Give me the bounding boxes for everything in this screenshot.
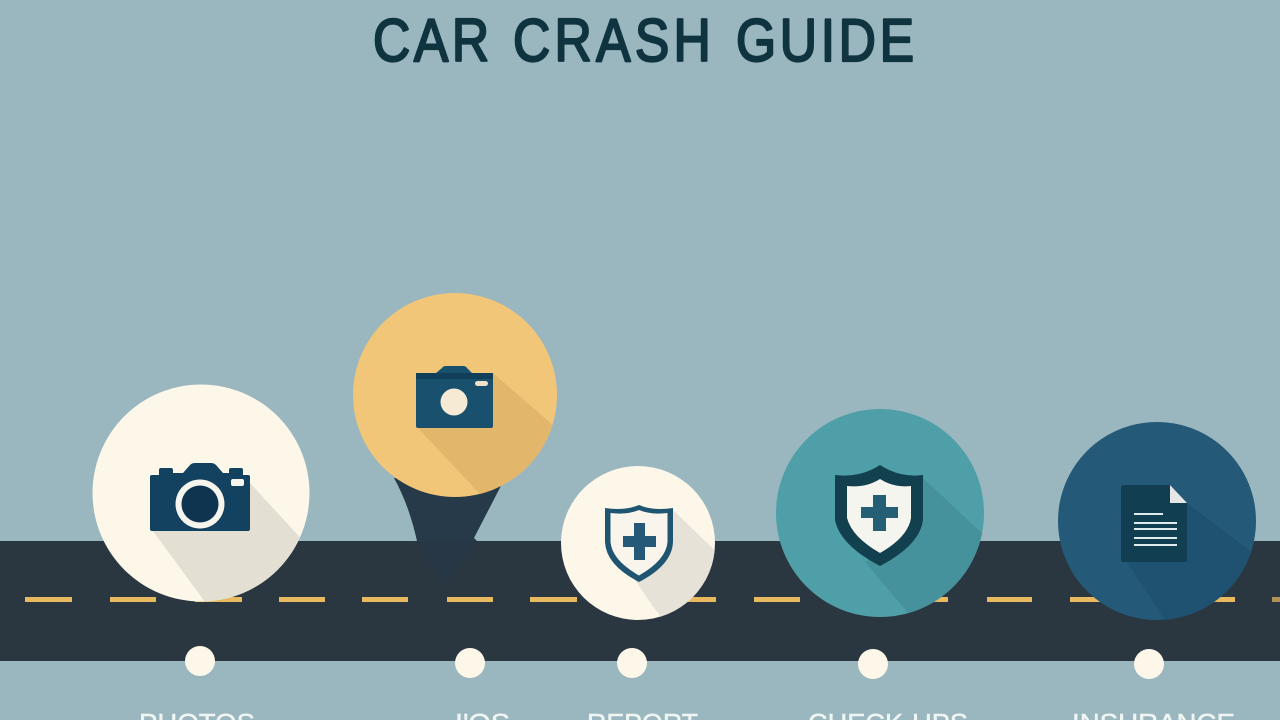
long shadow (153, 483, 300, 602)
timeline dot: report (617, 648, 647, 678)
step 4: check-ups circle (776, 409, 984, 617)
step 3: report circle (561, 466, 715, 620)
step 1: photos circle (92, 384, 310, 602)
long shadow (1132, 504, 1251, 620)
map pin stem (394, 478, 505, 582)
road (0, 541, 1280, 661)
icon: shield with cross (835, 465, 923, 566)
title: GUIDE (736, 6, 914, 74)
long shadow (418, 373, 552, 494)
title: CRASH (513, 6, 711, 74)
icon: document (1121, 485, 1187, 562)
timeline dot: check-ups (858, 649, 888, 679)
step 2: yellow circle (353, 293, 557, 497)
timeline dot: photos (185, 646, 215, 676)
step 5: insurance circle (1058, 422, 1256, 620)
long shadow (636, 510, 715, 616)
title (373, 6, 914, 74)
icon: shield with cross (605, 505, 673, 582)
title: CAR (373, 6, 489, 74)
timeline dot: insurance (1134, 649, 1164, 679)
long shadow (866, 478, 982, 614)
icon: camera (150, 463, 250, 531)
icon: camera (416, 366, 493, 428)
timeline dot: second step (455, 648, 485, 678)
